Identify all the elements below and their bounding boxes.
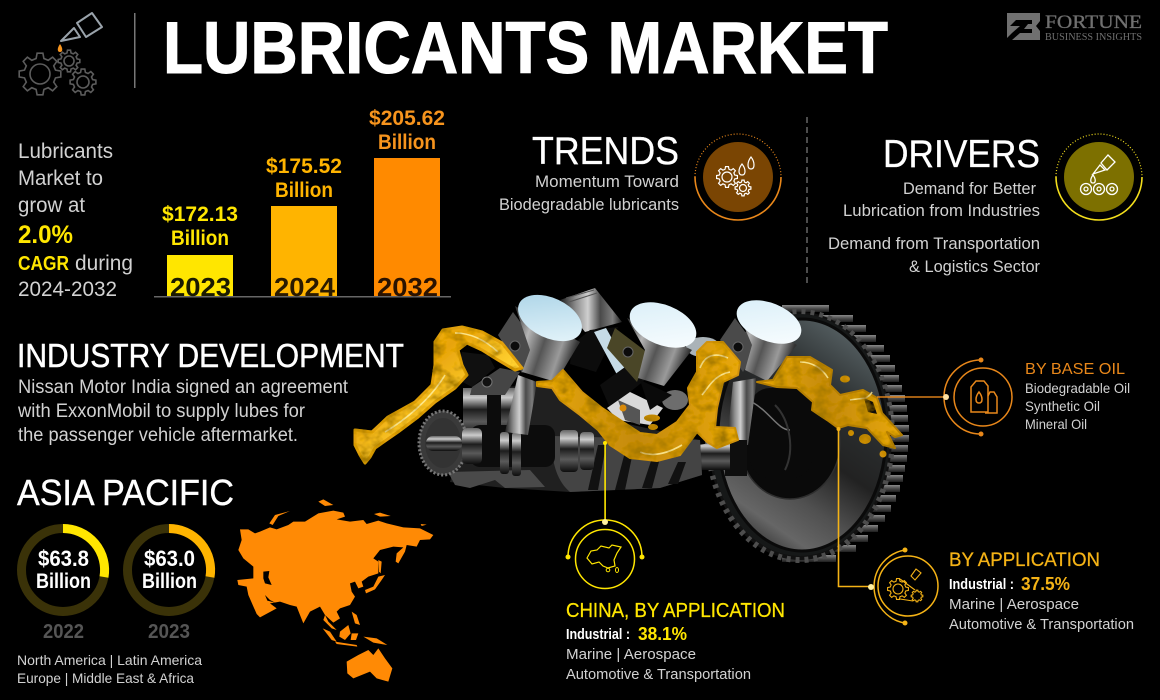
panel: trends: Biodegradable lubricants (499, 195, 679, 214)
logo: Fortune Business Insights: FORTUNE (1045, 12, 1142, 33)
pistons (498, 286, 808, 386)
callout: by application: Marine | Aerospace (949, 596, 1079, 613)
panel: trends: TRENDS (532, 130, 679, 173)
back piston (560, 288, 720, 384)
rods and centre block (505, 362, 688, 435)
callout: china by application: Marine | Aerospace (566, 646, 696, 663)
callout: china by application: 38.1% (638, 624, 687, 644)
text: other regions (17, 652, 202, 686)
text: CAGR statement: during (75, 252, 133, 275)
donut chart: 2022 (22, 528, 105, 643)
panel: drivers: Demand for Better (903, 179, 1036, 198)
map: asia pacific (237, 499, 433, 682)
gear wheel (708, 305, 909, 562)
callout: by application: BY APPLICATION (949, 550, 1100, 571)
logo: Fortune Business Insights (1007, 12, 1142, 43)
callout: by base oil (877, 358, 1130, 436)
text: CAGR statement (18, 140, 133, 301)
donut chart: 2022: 2022 (43, 621, 84, 643)
bar chart: market size: 2023 (170, 272, 231, 302)
bar chart: market size: Billion (378, 131, 436, 154)
callout: china by application: Automotive & Transportation (566, 666, 751, 683)
callout: china by application: CHINA, BY APPLICATION (566, 600, 785, 622)
title divider (134, 13, 136, 88)
donut chart: 2023: Billion (142, 570, 197, 593)
bar chart: market size (154, 107, 451, 302)
bar chart: market size: $172.13 (162, 203, 238, 226)
text: other regions: Europe | Middle East & Africa (17, 670, 194, 686)
callout: by application (836, 427, 1134, 633)
callout: china by application (566, 441, 785, 683)
text: CAGR statement: Market to (18, 167, 103, 190)
panel: drivers: DRIVERS (883, 133, 1040, 176)
callout: by application: Industrial : (949, 576, 1014, 593)
callout: by base oil: Mineral Oil (1025, 416, 1087, 432)
illustration: engine crankshaft, pistons and oil (355, 286, 909, 562)
panel: drivers: Lubrication from Industries (843, 201, 1040, 220)
logo: Fortune Business Insights: BUSINESS INSIGHTS (1045, 32, 1142, 43)
callout: china by application: Industrial : (566, 626, 630, 643)
bar chart: market size: 2024 (274, 272, 336, 302)
panel: drivers: Demand from Transportation (828, 234, 1040, 253)
heading: asia pacific: ASIA PACIFIC (17, 472, 234, 513)
donut chart: 2023: 2023 (148, 621, 190, 643)
text: other regions: North America | Latin America (17, 652, 202, 668)
panel: industry development (17, 337, 404, 446)
callout: by base oil: Biodegradable Oil (1025, 380, 1130, 396)
panel: trends: Momentum Toward (535, 172, 679, 191)
text: CAGR statement: grow at (18, 194, 85, 217)
panel: industry development: INDUSTRY DEVELOPMENT (17, 337, 404, 374)
panel: trends (499, 130, 679, 214)
text: CAGR statement: CAGR (18, 253, 69, 275)
panel: industry development: with ExxonMobil to supply lubes for (17, 401, 306, 422)
callout: by application: 37.5% (1021, 574, 1070, 594)
text: CAGR statement: 2.0% (18, 221, 73, 249)
donut chart: 2022: $63.8 (38, 546, 89, 571)
panel: industry development: the passenger vehicle aftermarket. (18, 425, 298, 446)
icon: oil bottle and gears (19, 13, 102, 95)
panel: drivers: & Logistics Sector (909, 257, 1040, 276)
bar chart: market size: $205.62 (369, 107, 445, 130)
divider (806, 117, 808, 285)
text: CAGR statement: Lubricants (18, 140, 113, 163)
callout: by base oil: Synthetic Oil (1025, 398, 1100, 414)
panel: drivers (828, 133, 1040, 276)
right crank section (698, 378, 812, 478)
panel: industry development: Nissan Motor India signed an agreement (18, 377, 349, 398)
bar chart: market size: $175.52 (266, 155, 342, 178)
bar chart: market size: Billion (275, 179, 333, 202)
text: CAGR statement: 2024-2032 (18, 278, 117, 301)
bar chart: market size: 2032 (377, 272, 438, 302)
icon: trends gears and drops (695, 134, 781, 220)
donut chart: 2023: $63.0 (144, 546, 195, 571)
bar chart: market size: Billion (171, 227, 229, 250)
callout: by application: Automotive & Transportation (949, 616, 1134, 633)
donut chart: 2023 (128, 528, 211, 643)
title: LUBRICANTS MARKET (163, 8, 888, 89)
crankshaft (419, 352, 702, 492)
icon: drivers bottle and chain (1056, 134, 1142, 220)
callout: by base oil: BY BASE OIL (1025, 361, 1125, 378)
donut chart: 2022: Billion (36, 570, 91, 593)
oil streams (355, 327, 902, 463)
